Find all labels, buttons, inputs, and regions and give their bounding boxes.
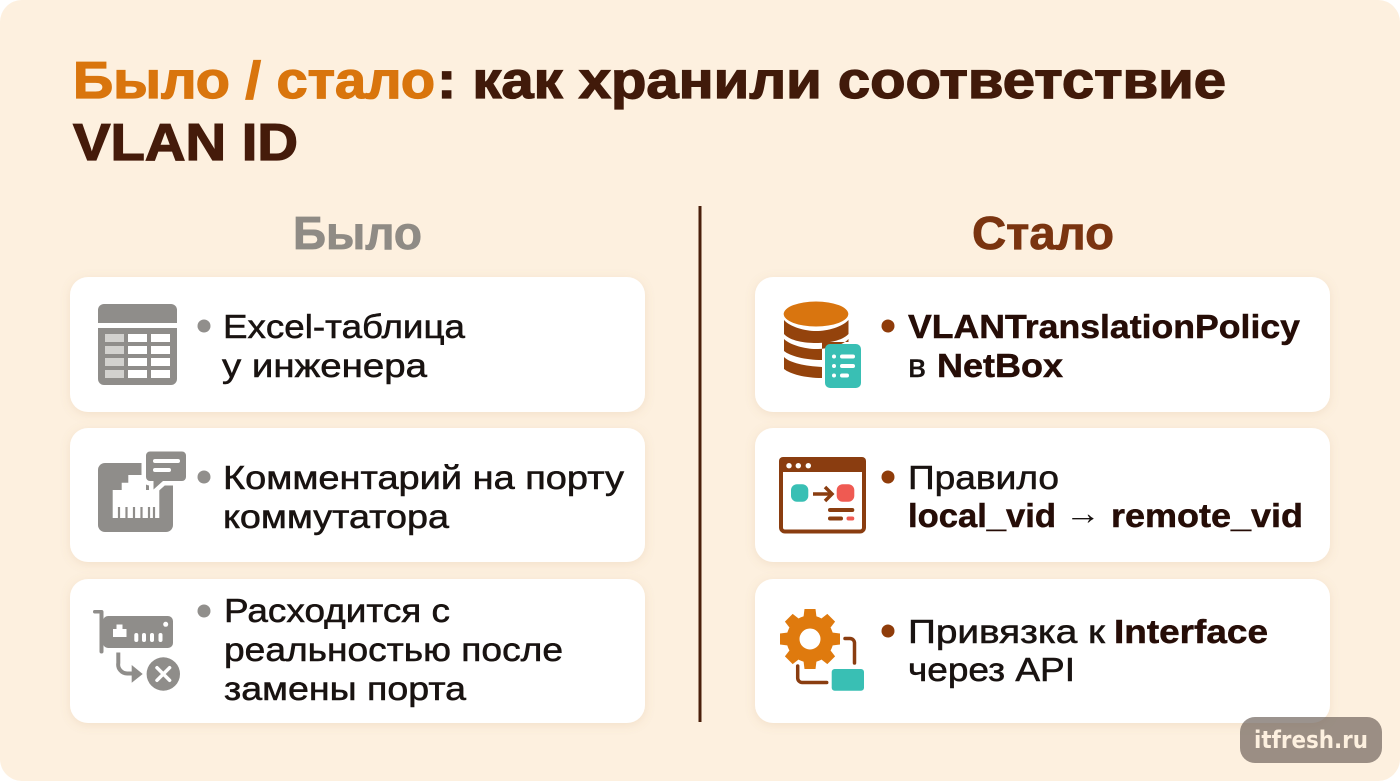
icon: network port with comment [98, 452, 186, 532]
text: Interface [1114, 613, 1268, 650]
icon: rule window [779, 457, 866, 532]
text: замены порта [224, 670, 467, 707]
text: через API [908, 651, 1075, 688]
panel: Стало card 1 [755, 277, 1330, 412]
text: remote_vid [1111, 497, 1303, 534]
bullet [882, 624, 894, 638]
icon: gear with interface [780, 609, 864, 691]
title [73, 52, 1226, 172]
panel: Было card 2 [70, 428, 645, 562]
text: коммутатора [223, 498, 450, 535]
text: Excel-таблица [223, 308, 466, 345]
text: Расходится с [224, 592, 450, 629]
bullet [198, 470, 210, 484]
icon: table [98, 304, 177, 385]
bullet [882, 320, 894, 332]
badge: site name: itfresh.ru [1254, 726, 1368, 754]
bullet [882, 470, 894, 484]
icon: database with list [784, 302, 861, 388]
title: VLAN ID [73, 114, 298, 172]
text: local_vid [908, 497, 1056, 534]
heading: Стало: Стало [972, 207, 1114, 259]
badge: site name [1240, 717, 1382, 763]
text [222, 308, 466, 384]
icon: network card with error [93, 610, 180, 691]
text: Комментарий на порту [223, 459, 625, 496]
bullet [198, 320, 210, 332]
text [908, 613, 1268, 688]
text: реальностью после [224, 631, 563, 668]
bullet [198, 604, 210, 618]
text: NetBox [937, 347, 1064, 384]
divider [698, 206, 702, 722]
heading: Было: Было [293, 207, 422, 259]
text [223, 459, 625, 535]
text: VLANTranslationPolicy [908, 308, 1301, 345]
text: → [1065, 494, 1101, 531]
title: Было / стало [73, 52, 435, 110]
text [908, 308, 1301, 384]
text: Привязка к [908, 613, 1106, 650]
text: в [908, 347, 926, 384]
panel: Стало card 2 [755, 428, 1330, 562]
text: Правило [908, 459, 1059, 496]
panel: Было card 1 [70, 277, 645, 412]
panel: Стало card 3 [755, 579, 1330, 723]
text: у инженера [222, 347, 428, 384]
text [908, 459, 1303, 534]
title: : как хранили соответствие [437, 52, 1226, 110]
text [224, 592, 563, 707]
panel: Было card 3 [70, 579, 645, 723]
